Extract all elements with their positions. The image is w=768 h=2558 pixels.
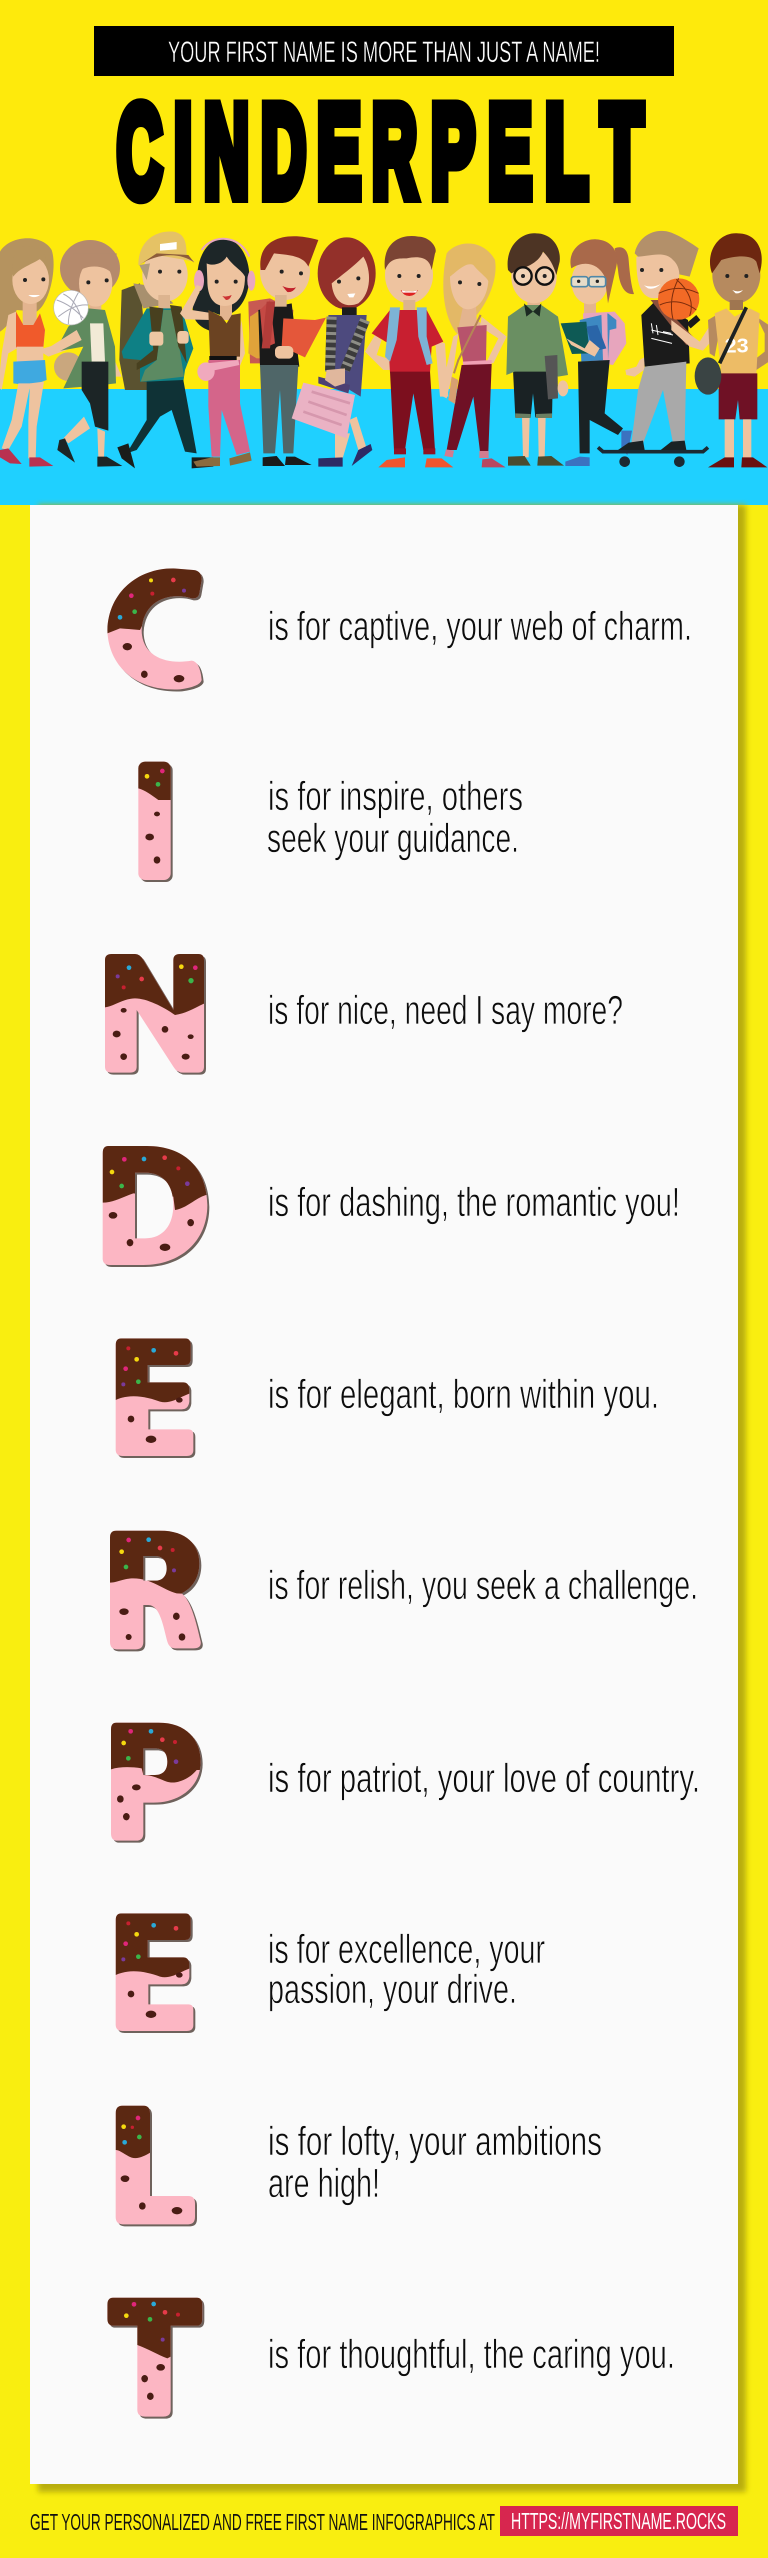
illustration: group of people centre [248, 236, 507, 467]
row: E [110, 1333, 659, 1458]
title: C [117, 78, 162, 224]
tagline banner [94, 26, 674, 76]
illustration: group of people right [506, 231, 768, 467]
row: T [103, 2293, 675, 2419]
row: D [97, 1140, 680, 1267]
text: E second lines [268, 1926, 545, 2012]
person 3 hiker with backpack [117, 231, 213, 468]
icon: letter P [111, 1722, 203, 1843]
text: L lines [268, 2118, 602, 2206]
person 8 blonde [440, 243, 507, 467]
person 4 with headphones [180, 238, 255, 467]
icon: letter I [138, 762, 173, 882]
row: E second [110, 1908, 545, 2033]
person 10 with ponytail [561, 239, 634, 466]
cyan floor band [0, 389, 768, 505]
title: N [204, 78, 249, 224]
row: I [133, 757, 523, 882]
row: P [103, 1717, 700, 1843]
person 2 with volleyball [45, 240, 122, 467]
person 12 with jersey: 23 [725, 334, 749, 357]
title: D [261, 78, 306, 224]
title: P [431, 78, 475, 224]
icon: letter R [110, 1530, 203, 1652]
text: I lines: is for inspire, others [268, 773, 523, 819]
title: L [545, 78, 588, 224]
person 6 with pink bag [292, 237, 376, 467]
row: L [110, 2100, 602, 2226]
person 5 with book [248, 236, 326, 466]
row: N [100, 950, 623, 1075]
icon: letter E second [116, 1913, 196, 2033]
title: T [601, 78, 643, 224]
row: C [103, 563, 692, 691]
icon: letter L [116, 2106, 197, 2226]
title: I [174, 78, 192, 224]
person 9 with glasses [506, 233, 568, 466]
text: I lines [267, 773, 523, 861]
illustration: group of people left [0, 231, 255, 468]
text: L lines: are high! [268, 2160, 380, 2206]
person 1 [0, 238, 80, 467]
title: E [488, 78, 532, 224]
panel: letter list [30, 505, 738, 2484]
panel: letter list shadow [38, 505, 746, 2492]
text: E second lines: passion, your drive. [268, 1966, 517, 2012]
row: R [103, 1523, 698, 1651]
icon: letter N [100, 950, 208, 1075]
text: I lines: seek your guidance. [267, 815, 519, 861]
text: L lines: is for lofty, your ambitions [268, 2118, 602, 2164]
icon: letter E [116, 1338, 196, 1458]
text: N line: is for nice, need I say more? [268, 987, 623, 1033]
panel: header [0, 0, 768, 505]
person 12 with jersey [695, 233, 768, 467]
icon: letter C [103, 563, 207, 691]
title: E [317, 78, 361, 224]
person 11 on skateboard with basketball [598, 231, 721, 467]
title: R [372, 78, 417, 224]
footer [30, 2506, 738, 2536]
text: E second lines: is for excellence, your [268, 1926, 545, 1972]
icon: letter T [103, 2293, 207, 2419]
person 7 in red shirt [365, 236, 453, 467]
icon: letter D [102, 1146, 210, 1267]
